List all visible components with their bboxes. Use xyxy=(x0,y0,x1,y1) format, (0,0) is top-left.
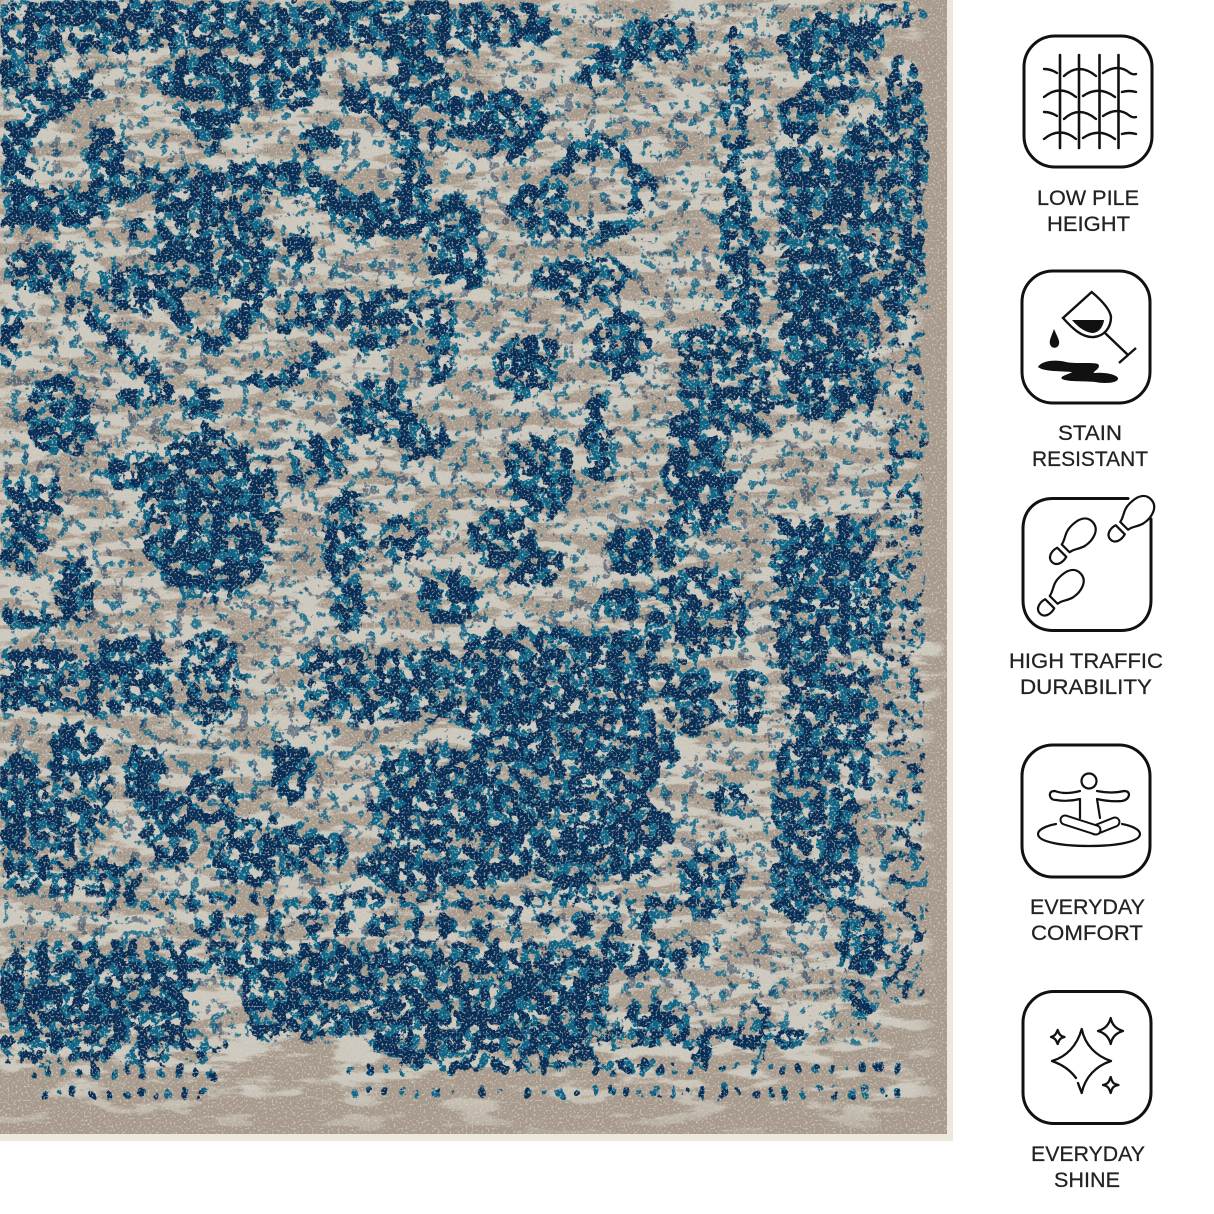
icon: low pile xyxy=(1024,36,1152,167)
icon: seated person on rug xyxy=(1022,745,1150,877)
label: everyday shine: SHINE xyxy=(1054,1168,1120,1192)
label: low pile height: LOW PILE xyxy=(1037,186,1139,210)
label: stain resistant: STAIN xyxy=(1058,421,1122,445)
label: high traffic durability: DURABILITY xyxy=(1020,675,1152,699)
label: everyday comfort: EVERYDAY xyxy=(1030,895,1145,919)
rug pile grain xyxy=(0,0,951,1137)
label: everyday shine xyxy=(1031,1142,1145,1192)
label: low pile height xyxy=(1037,186,1139,236)
icon: spilled wine xyxy=(1022,271,1150,403)
rug base taupe xyxy=(0,0,951,1137)
label: stain resistant: RESISTANT xyxy=(1032,447,1148,471)
label: everyday comfort: COMFORT xyxy=(1031,921,1143,945)
rug cream mottling xyxy=(0,0,970,1145)
feature: everyday shine xyxy=(1023,992,1151,1192)
feature: high traffic durability xyxy=(1009,491,1163,699)
feature: low pile height xyxy=(1024,36,1152,236)
label: everyday shine: EVERYDAY xyxy=(1031,1142,1145,1166)
icon: footprints xyxy=(1023,491,1160,630)
label: low pile height: HEIGHT xyxy=(1047,212,1130,236)
label: high traffic durability xyxy=(1009,649,1163,699)
label: high traffic durability: HIGH TRAFFIC xyxy=(1009,649,1163,673)
icon: sparkles xyxy=(1023,992,1151,1124)
rug pattern teal layer xyxy=(0,0,927,1095)
rug bound edge xyxy=(0,0,953,1141)
label: stain resistant xyxy=(1032,421,1148,471)
rug photograph xyxy=(0,0,970,1145)
feature: everyday comfort xyxy=(1022,745,1150,945)
rug pattern navy layer xyxy=(0,0,927,1095)
feature: stain resistant xyxy=(1022,271,1150,471)
label: everyday comfort xyxy=(1030,895,1145,945)
